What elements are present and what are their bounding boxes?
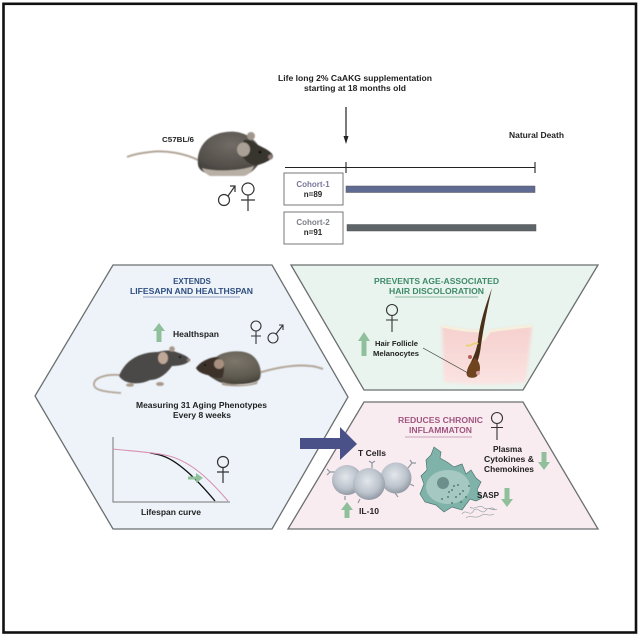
icon: down arrow cytokines	[538, 452, 550, 470]
heading	[130, 277, 253, 297]
label: plasma cytokines and chemokines	[484, 445, 535, 474]
arrow: large blue arrow	[300, 427, 357, 460]
heading: HAIR DISCOLORATION	[389, 287, 484, 296]
icon: down arrow SASP	[501, 488, 513, 507]
icon: male symbol	[268, 325, 283, 343]
label: T Cells: T Cells	[358, 449, 387, 458]
cohort 2 bar	[347, 224, 536, 231]
illustration: hair follicle in skin	[442, 288, 532, 385]
supplementation heading: starting at 18 months old	[304, 83, 406, 93]
text: measuring phenotypes: Every 8 weeks	[173, 410, 231, 420]
label: IL-10: IL-10	[359, 507, 380, 516]
icon: treated mouse	[94, 346, 190, 393]
label: plasma cytokines and chemokines: Chemokines	[484, 465, 535, 474]
heading: LIFESAPN AND HEALTHSPAN	[130, 287, 253, 296]
heading: EXTENDS	[173, 277, 212, 286]
label: plasma cytokines and chemokines: Plasma	[493, 445, 523, 454]
icon: control mouse	[196, 351, 323, 386]
label: hair follicle melanocytes: Hair Follicle	[375, 339, 418, 348]
cohort 1 box	[284, 173, 343, 205]
panel: hair discoloration trapezoid	[291, 265, 598, 390]
icon: female symbol	[386, 304, 398, 332]
icon: female symbol	[217, 456, 229, 483]
icon: right arrow on curve	[188, 473, 203, 483]
label: plasma cytokines and chemokines: Cytokines &	[484, 455, 534, 464]
icon: up arrow melanocytes	[358, 332, 370, 356]
icon: female symbol	[241, 183, 255, 211]
text: measuring phenotypes	[136, 400, 267, 420]
heading: PREVENTS AGE-ASSOCIATED	[374, 277, 499, 286]
cohort 1 box: n=89	[304, 190, 323, 199]
icon: C57BL/6 mouse	[127, 132, 273, 176]
label: hair follicle melanocytes	[373, 339, 419, 358]
illustration: T cells	[327, 460, 416, 503]
text: measuring phenotypes: Measuring 31 Aging Phenotypes	[136, 400, 267, 410]
supplementation heading	[278, 73, 432, 93]
icon: female symbol	[491, 412, 503, 440]
icon: female symbol	[251, 321, 261, 344]
supplementation heading: Life long 2% CaAKG supplementation	[278, 73, 432, 83]
icon: up arrow IL-10	[341, 502, 353, 518]
icon: up arrow healthspan	[153, 323, 165, 342]
arrow: start of supplementation	[344, 107, 348, 144]
label: Natural Death: Natural Death	[509, 131, 564, 140]
label: SASP: SASP	[477, 491, 499, 500]
cohort 1 box: Cohort-1	[296, 180, 330, 189]
label: hair follicle melanocytes: Melanocytes	[373, 349, 419, 358]
label: Healthspan: Healthspan	[173, 330, 219, 339]
heading	[398, 416, 483, 437]
heading: REDUCES CHRONIC	[398, 416, 483, 425]
cohort 2 box	[284, 212, 343, 244]
cohort 2 box: n=91	[304, 228, 323, 237]
timeline	[285, 162, 535, 173]
cohort 2 box: Cohort-2	[296, 218, 330, 227]
panel: chronic inflammation trapezoid	[288, 402, 598, 529]
pointer line	[423, 348, 468, 373]
heading	[374, 277, 499, 297]
icon: male symbol	[218, 186, 235, 206]
top section: study design	[127, 73, 564, 244]
label: C57BL/6: C57BL/6	[162, 137, 194, 144]
panel: lifespan and healthspan hexagon	[35, 265, 348, 529]
illustration: senescent macrophage	[420, 447, 497, 518]
heading: INFLAMMATON	[409, 426, 472, 435]
chart: lifespan curve	[113, 437, 230, 502]
cohort 1 bar	[346, 186, 535, 192]
label: Lifespan curve: Lifespan curve	[141, 508, 202, 517]
